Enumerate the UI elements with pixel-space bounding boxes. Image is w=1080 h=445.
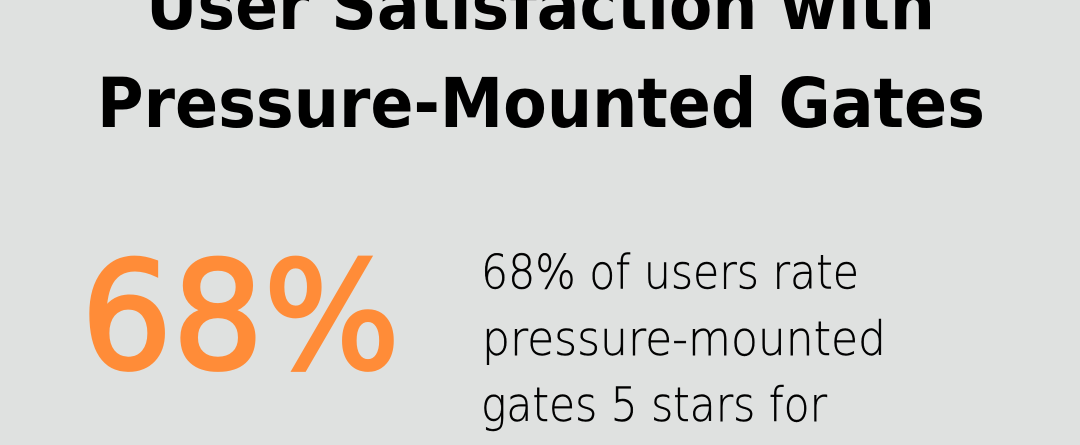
description text: [481, 246, 886, 433]
description text: 68% of users rate: [481, 246, 859, 300]
description text: pressure-mounted: [482, 312, 886, 367]
statistic: 68%: 68%: [81, 231, 400, 404]
title: [97, 0, 985, 144]
title: Pressure-Mounted Gates: [97, 64, 985, 144]
description text: gates 5 stars for: [481, 378, 828, 433]
